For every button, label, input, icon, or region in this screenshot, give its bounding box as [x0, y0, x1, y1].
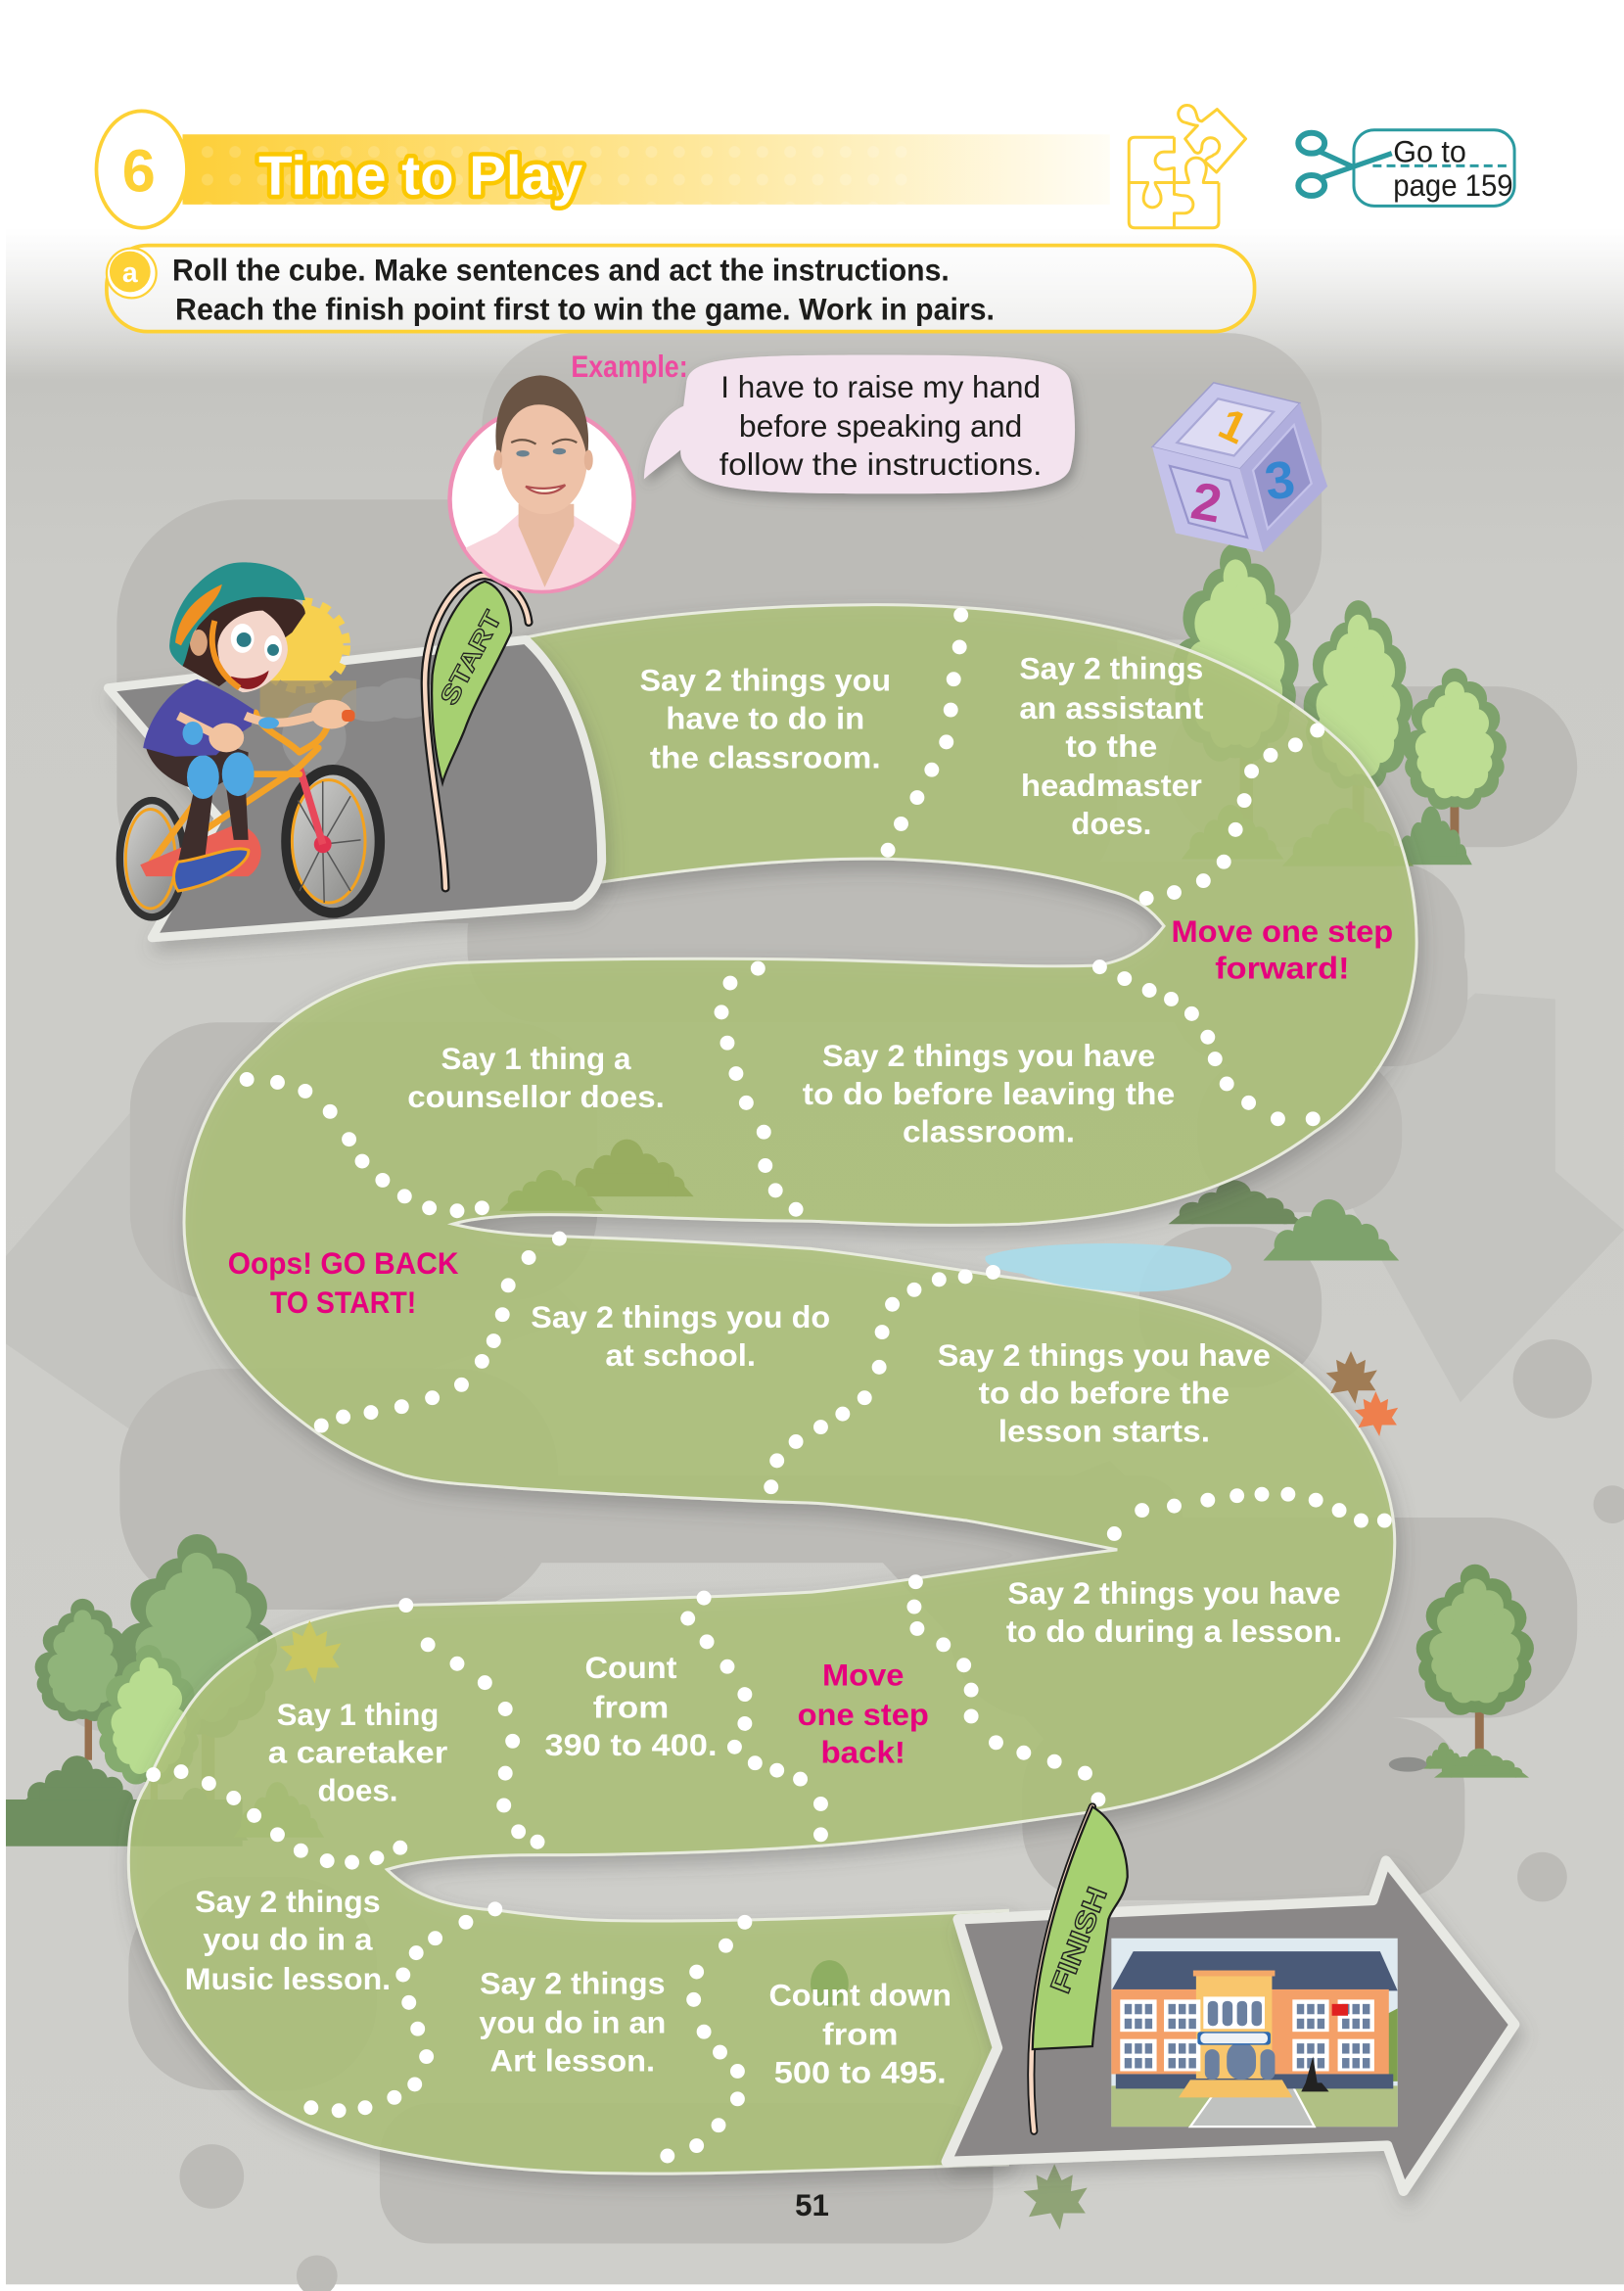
chapter number badge: [96, 111, 187, 228]
square: move back: back!: [820, 1736, 905, 1770]
bike frame: [152, 713, 330, 862]
exhaust clouds: [282, 678, 439, 772]
square: during a lesson: Say 2 things you have: [1007, 1576, 1341, 1611]
boy on a bicycle: [119, 562, 439, 917]
pedal and chain guard: [140, 825, 261, 876]
square: music lesson: Music lesson.: [185, 1962, 391, 1996]
finish flag: FINISH: [1044, 1883, 1114, 1997]
tree right: [1389, 1565, 1534, 1778]
helmet: [169, 562, 305, 666]
square: move forward: Move one step: [1172, 914, 1393, 949]
square: caretaker: Say 1 thing: [277, 1698, 439, 1732]
square: go back to start: TO START!: [270, 1286, 416, 1320]
page number: 51: [795, 2188, 829, 2222]
square: before leaving: classroom.: [903, 1115, 1075, 1149]
badge a: [107, 249, 157, 298]
icon: puzzle: [1129, 106, 1246, 228]
speech bubble: [644, 355, 1075, 493]
square: music lesson: you do in a: [203, 1923, 373, 1957]
icon: dice cube: 2: [1187, 471, 1226, 535]
student portrait: [450, 375, 633, 599]
road: green winding track: [128, 605, 1416, 2174]
start flag: [425, 576, 529, 888]
start road section: [108, 639, 602, 938]
square: count down: 500 to 495.: [774, 2055, 947, 2089]
icon: dice cube: [1152, 383, 1327, 552]
square: before leaving: to do before leaving the: [803, 1077, 1175, 1111]
bushes and pond on the road: [499, 1140, 1231, 2007]
dotted dividers between squares: [146, 608, 1392, 2163]
tree group left: [6, 1534, 324, 1847]
shoe: [174, 849, 249, 891]
square: assistant: headmaster: [1021, 769, 1202, 803]
square: move back: Move: [822, 1659, 904, 1693]
title: Time to Play: [258, 145, 583, 207]
icon: sun: [260, 605, 356, 719]
go to page 159 tag: page 159: [1393, 168, 1513, 203]
bushes on road edge right: [1169, 1180, 1399, 1260]
square: caretaker: does.: [318, 1773, 398, 1807]
square: before leaving: Say 2 things you have: [822, 1039, 1155, 1073]
title banner: [96, 111, 1110, 228]
legs: [146, 737, 249, 862]
square: classroom: the classroom.: [650, 741, 881, 775]
square: classroom: have to do in: [666, 701, 864, 735]
finish flag: [1031, 1806, 1128, 2131]
square: before the lesson: lesson starts.: [998, 1414, 1210, 1448]
shirt: [143, 679, 255, 757]
example label: Example:: [571, 350, 688, 384]
go to page 159 tag: [1298, 130, 1514, 206]
chapter number badge: 6: [122, 137, 156, 204]
front wheel: [286, 767, 380, 912]
bubble text: before speaking and: [739, 409, 1022, 444]
bubble text: [719, 370, 1042, 482]
school building picture: [1111, 1939, 1398, 2127]
square: during a lesson: to do during a lesson.: [1006, 1614, 1342, 1649]
square: classroom: Say 2 things you: [639, 664, 891, 698]
square: count 390 to 400: from: [593, 1690, 669, 1724]
square: counsellor: counsellor does.: [407, 1080, 665, 1114]
square: move back: one step: [798, 1698, 929, 1732]
start flag: START: [436, 606, 508, 710]
square: move forward: forward!: [1215, 952, 1350, 986]
square: assistant: to the: [1065, 729, 1157, 764]
square: caretaker: a caretaker: [268, 1736, 447, 1770]
square: assistant: an assistant: [1019, 691, 1204, 725]
knee pads: [187, 752, 255, 799]
arms and hands: [178, 700, 355, 752]
badge a: a: [122, 257, 138, 289]
square: art lesson: Say 2 things: [480, 1966, 666, 2000]
square: count 390 to 400: Count: [585, 1651, 677, 1685]
square: count down: Count down: [768, 1978, 951, 2012]
square: at school: Say 2 things you do: [531, 1300, 830, 1334]
square: counsellor: Say 1 thing a: [441, 1042, 631, 1076]
instruction box: [107, 246, 1255, 332]
square: before the lesson: to do before the: [979, 1377, 1230, 1411]
square: at school: at school.: [605, 1338, 756, 1373]
square: go back to start: Oops! GO BACK: [228, 1246, 459, 1281]
tree group top right: [1173, 543, 1507, 866]
square: assistant: Say 2 things: [1019, 652, 1203, 686]
icon: dice cube: 1: [1212, 399, 1254, 453]
head: [183, 595, 305, 692]
square: art lesson: you do in an: [479, 2006, 666, 2040]
square: count down: from: [822, 2018, 899, 2052]
icon: dice cube: 3: [1261, 449, 1298, 512]
bubble text: I have to raise my hand: [720, 370, 1041, 404]
finish arrow road with school: [947, 1861, 1514, 2191]
icon: scissors: [1298, 133, 1392, 196]
square: art lesson: Art lesson.: [490, 2043, 655, 2078]
instruction box: Reach the finish point first to win the game. Work in pairs.: [175, 293, 995, 327]
square: count 390 to 400: 390 to 400.: [544, 1728, 718, 1762]
go to page 159 tag: Go to: [1393, 135, 1466, 169]
bubble text: follow the instructions.: [719, 447, 1042, 482]
square: assistant: does.: [1071, 807, 1151, 841]
rear wheel: [119, 801, 184, 917]
fallen leaves: [280, 1351, 1398, 2229]
square: before the lesson: Say 2 things you have: [938, 1338, 1271, 1373]
instruction box: Roll the cube. Make sentences and act the instructions.: [172, 253, 950, 287]
square: music lesson: Say 2 things: [195, 1885, 381, 1919]
